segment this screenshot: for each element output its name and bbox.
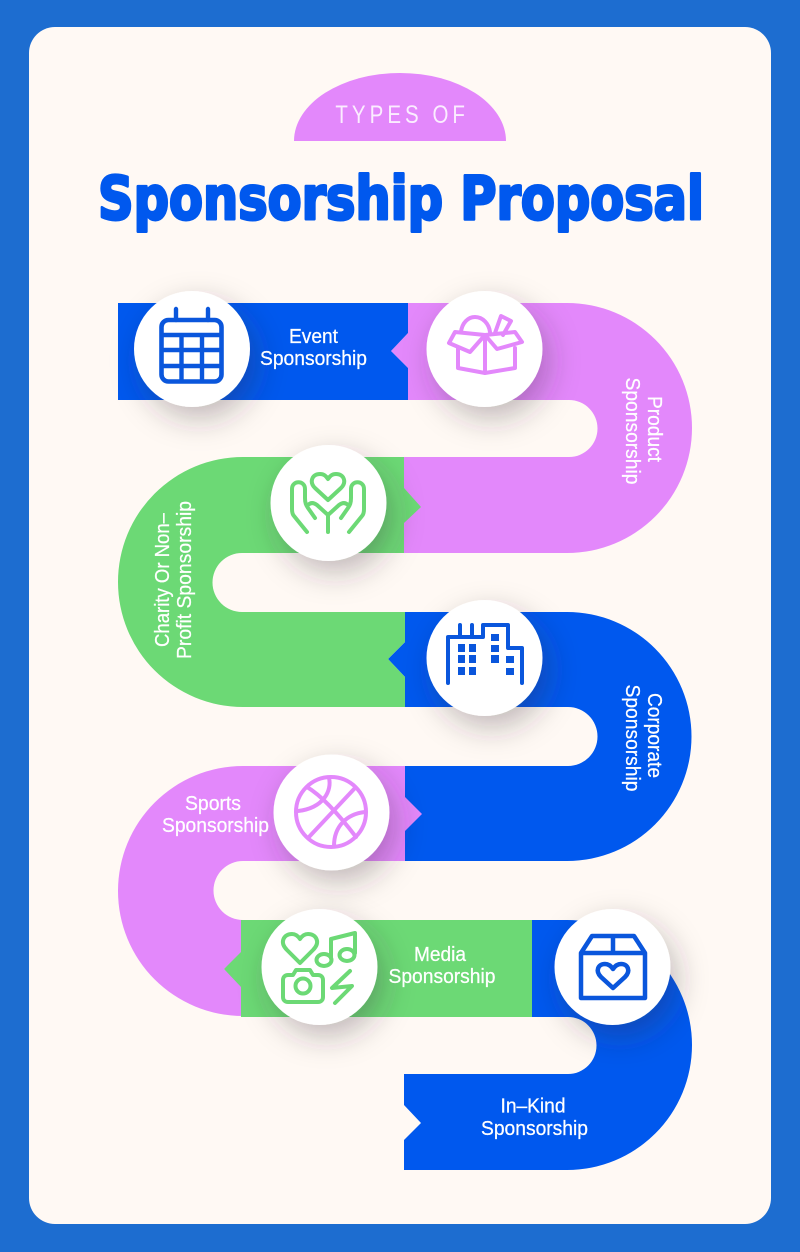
segment: event band: [118, 303, 408, 400]
segment: charity band: [118, 457, 421, 707]
label: media sponsorship: Media: [414, 944, 467, 966]
icon: event calendar: [134, 291, 250, 407]
label: product sponsorship: Product: [643, 396, 665, 462]
segment: media band: [224, 920, 532, 1017]
icon: corporate buildings: [426, 600, 542, 716]
label: in-kind sponsorship: Sponsorship: [481, 1118, 588, 1140]
segment: product band: [391, 303, 692, 553]
label: corporate sponsorship: Sponsorship: [621, 684, 643, 792]
label: charity or non-profit sponsorship: [152, 501, 196, 659]
winding path: [118, 303, 692, 1170]
header badge: types of: TYPES OF: [335, 100, 465, 128]
icon: charity hands and heart: [270, 445, 386, 561]
label: media sponsorship: Sponsorship: [388, 966, 496, 988]
label: event sponsorship: Event: [289, 326, 338, 348]
icon: media collage: [262, 909, 378, 1025]
label: product sponsorship: Sponsorship: [621, 378, 643, 484]
label: event sponsorship: Sponsorship: [260, 348, 367, 370]
segment: sports band: [118, 766, 422, 1016]
label: corporate sponsorship: Corporate: [643, 693, 665, 778]
label: corporate sponsorship: [621, 684, 665, 792]
segment: corporate band: [388, 612, 692, 861]
header badge: types of: [294, 73, 506, 141]
label: charity or non-profit sponsorship: Profit Sponsorship: [174, 501, 196, 659]
label: sports sponsorship: Sports: [185, 793, 241, 815]
label: charity or non-profit sponsorship: Charity Or Non–: [152, 512, 174, 647]
icon: product gift box: [426, 291, 542, 407]
segment: in-kind band: [404, 920, 692, 1170]
icon: sports basketball: [274, 754, 390, 870]
label: in-kind sponsorship: In–Kind: [500, 1096, 566, 1118]
label: sports sponsorship: Sponsorship: [162, 815, 269, 837]
icon: in-kind box with heart: [554, 909, 670, 1025]
label: product sponsorship: [621, 378, 665, 484]
